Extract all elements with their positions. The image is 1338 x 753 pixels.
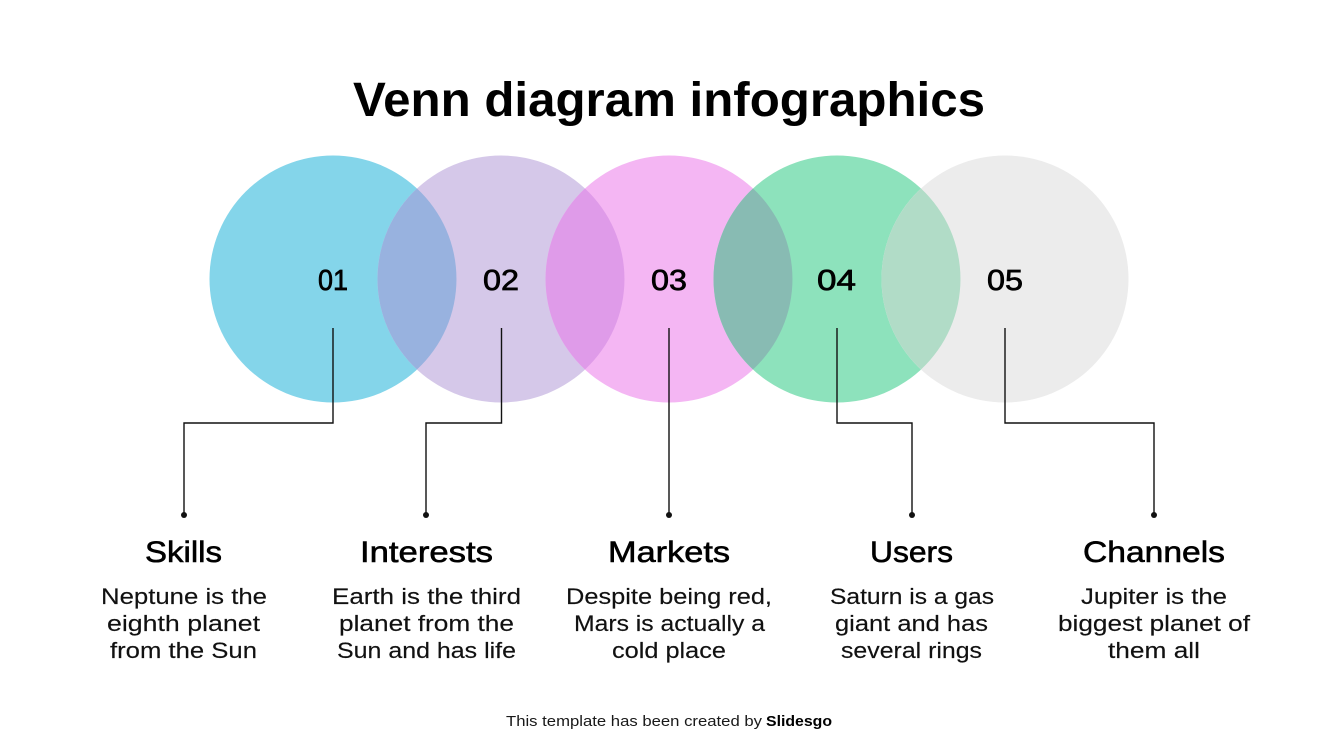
footer credit: This template has been created by [506, 713, 763, 730]
description: Markets: cold place [612, 638, 726, 663]
description: Users: several rings [841, 638, 982, 663]
overlap 01-02 [378, 188, 456, 370]
circle 04: green [714, 156, 960, 402]
heading: Channels: Channels [1083, 536, 1225, 569]
overlap 02-03 [546, 188, 624, 370]
title: Venn diagram infographics [353, 74, 985, 127]
connector 03 [666, 328, 672, 518]
description: Interests: Sun and has life [337, 638, 516, 663]
description: Users: Saturn is a gas [830, 584, 994, 609]
description: Channels: biggest planet of [1058, 611, 1251, 636]
description: Skills: eighth planet [107, 611, 261, 636]
footer credit: Slidesgo [766, 713, 832, 730]
venn diagram [210, 156, 1128, 402]
description: Skills: Neptune is the [101, 584, 267, 609]
number 03: 03 [651, 265, 687, 297]
overlap 04-05 [882, 188, 960, 370]
description: Users: giant and has [835, 611, 988, 636]
heading: Users: Users [870, 536, 953, 569]
column: Channels [1058, 536, 1251, 663]
connector 04 [837, 328, 915, 518]
description: Skills [101, 584, 267, 663]
column: Markets [566, 536, 772, 663]
description: Markets: Mars is actually a [574, 611, 766, 636]
number 05: 05 [987, 265, 1023, 297]
description: Interests [332, 584, 521, 663]
description: Skills: from the Sun [110, 638, 257, 663]
number 04: 04 [817, 265, 856, 297]
description: Markets: Despite being red, [566, 584, 772, 609]
description: Channels [1058, 584, 1251, 663]
column: Interests [332, 536, 521, 663]
column: Users [830, 536, 994, 663]
description: Interests: planet from the [339, 611, 514, 636]
number 02: 02 [483, 265, 519, 297]
connector 05 [1005, 328, 1157, 518]
connector 02 [423, 328, 502, 518]
circle 03: pink [546, 156, 792, 402]
heading: Markets: Markets [608, 536, 730, 569]
connector 01 [181, 328, 333, 518]
description: Interests: Earth is the third [332, 584, 521, 609]
description: Markets [566, 584, 772, 663]
circle 02: purple [378, 156, 624, 402]
description: Channels: them all [1108, 638, 1200, 663]
number 01: 01 [318, 265, 348, 297]
circle 05: grey [882, 156, 1128, 402]
column: Skills [101, 536, 267, 663]
description: Channels: Jupiter is the [1081, 584, 1227, 609]
description: Users [830, 584, 994, 663]
circle 01: blue [210, 156, 456, 402]
heading: Interests: Interests [360, 536, 493, 569]
heading: Skills: Skills [145, 536, 222, 569]
overlap 03-04 [714, 188, 792, 370]
